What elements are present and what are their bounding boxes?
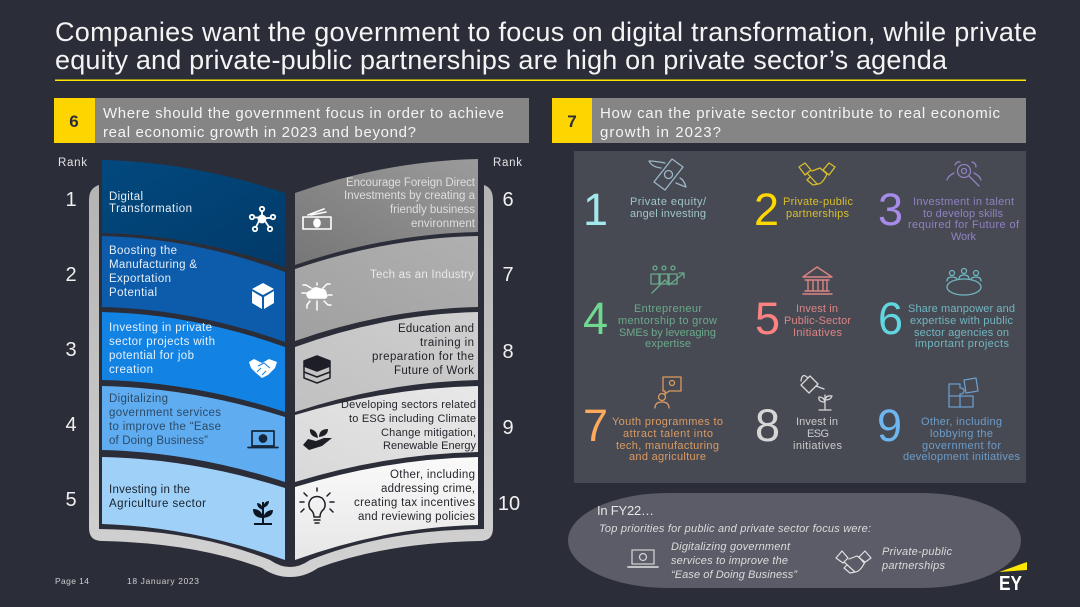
right page: band 8 education and training: training in: [420, 337, 474, 349]
item 8 ESG: initiatives: [793, 440, 842, 452]
item 1 private equity: [583, 159, 707, 235]
left page: band 5 agriculture: Agriculture sector: [109, 498, 206, 510]
book cover: [89, 170, 493, 577]
priority 1 text: “Ease of Doing Business”: [671, 569, 798, 581]
item 4 entrepreneur mentorship: expertise: [645, 338, 691, 350]
rank labels left: 4: [65, 414, 77, 436]
left page: band 2 manufacturing and exportation: [102, 236, 285, 342]
icon: money: [303, 209, 331, 229]
header: question 7: 7: [567, 112, 577, 131]
header: question 6: [54, 98, 529, 143]
rank labels left: 2: [65, 264, 77, 286]
item 1 private equity: Private equity/: [630, 196, 707, 208]
right page: band 8 education and training: Education and: [398, 323, 474, 335]
item 1 private equity: 1: [583, 184, 608, 235]
left page: band 3 private sector projects: Investing in private: [109, 322, 212, 334]
callout: FY22 priorities: In FY22…: [597, 503, 654, 518]
item 3 talent: Investment in talent: [913, 196, 1014, 208]
priority 1 text: services to improve the: [671, 555, 788, 567]
left page: band 4 digitalizing government services: Digitalizing: [109, 393, 168, 405]
item 6 share manpower: Share manpower and: [908, 303, 1015, 315]
icon: cloud circuit: [302, 283, 332, 310]
item 5 public sector: Invest in: [796, 303, 838, 315]
right page: band 9 ESG sectors: to ESG including Climate: [349, 413, 476, 425]
left page: band 5 agriculture: Investing in the: [109, 484, 190, 496]
item 5 public sector: Public-Sector: [784, 315, 851, 327]
priority 2 text: [881, 546, 952, 572]
item 6 share manpower: important projects: [915, 338, 1010, 350]
right page: band 9 ESG sectors: [295, 386, 478, 482]
left page: band 4 digitalizing government services: to improve the “Ease: [109, 421, 221, 433]
icon: handshake: [249, 359, 277, 378]
item 1 private equity: angel investing: [630, 208, 706, 220]
item 9 other: government for: [922, 440, 1001, 452]
item 5 public sector: 5: [755, 293, 780, 344]
priority 2 text: partnerships: [881, 560, 946, 572]
item 2 private-public partnerships: [754, 163, 854, 235]
right page: band 7 tech as an industry: Tech as an Industry: [370, 269, 474, 281]
right page: band 10 other: Other, including: [390, 469, 475, 481]
item 3 talent: 3: [878, 184, 903, 235]
item 9 other: lobbying the: [930, 428, 993, 440]
item 7 youth programmes: Youth programmes to: [612, 416, 723, 428]
icon: magnifier on people: [947, 162, 981, 186]
left page: band 1 digital transformation: [102, 160, 285, 267]
header: question 7: [552, 98, 1026, 143]
item 9 other: development initiatives: [903, 451, 1020, 463]
EY logo: EY: [999, 573, 1023, 595]
rank labels left: [58, 157, 87, 511]
item 6 share manpower: 6: [878, 293, 903, 344]
item 7 youth programmes: and agriculture: [629, 451, 706, 463]
rank labels right: [493, 157, 522, 515]
left page: band 3 private sector projects: sector projects with: [109, 336, 215, 348]
rank labels right: 9: [502, 417, 514, 439]
right page: band 6 foreign direct investment: [295, 159, 478, 265]
item 7 youth programmes: attract talent into: [623, 428, 713, 440]
right page: band 6 foreign direct investment: Encourage Foreign Direct: [346, 177, 476, 189]
right page: band 9 ESG sectors: Renewable Energy: [383, 440, 476, 452]
item 3 talent: to develop skills: [923, 208, 1004, 220]
header: question 7: growth in 2023?: [600, 124, 721, 141]
title: [55, 17, 1037, 75]
title: Companies want the government to focus on digital transformation, while private: [55, 17, 1037, 47]
item 7 youth programmes: 7: [583, 400, 608, 451]
icon: winged money: [649, 159, 686, 190]
panel: private sector contributions: [574, 151, 1026, 483]
item 2 private-public partnerships: partnerships: [786, 208, 850, 220]
rank labels right: 8: [502, 341, 514, 363]
right page: band 6 foreign direct investment: friendly business: [390, 204, 475, 216]
rank labels left: Rank: [58, 157, 87, 169]
rank labels left: 3: [65, 339, 77, 361]
footer: [55, 576, 199, 586]
rank labels left: 5: [65, 489, 77, 511]
item 4 entrepreneur mentorship: Entrepreneur: [634, 303, 702, 315]
right page: band 10 other: and reviewing policies: [358, 511, 475, 523]
rank labels right: Rank: [493, 157, 522, 169]
left page: band 4 digitalizing government services: of Doing Business”: [109, 435, 208, 447]
header: question 6: Where should the government focus in order to achieve: [103, 105, 504, 122]
left page: band 1 digital transformation: Digital: [109, 191, 143, 203]
right page: band 6 foreign direct investment: Investments by creating a: [344, 190, 476, 202]
left page: band 4 digitalizing government services: government services: [109, 407, 221, 419]
item 4 entrepreneur mentorship: mentorship to grow: [618, 315, 717, 327]
icon: person with idea: [655, 377, 681, 408]
item 2 private-public partnerships: Private-public: [783, 196, 854, 208]
callout: FY22 priorities: Top priorities for public and private sector focus were:: [599, 523, 871, 535]
priority 2 text: Private-public: [882, 546, 952, 558]
header: question 7: How can the private sector contribute to real economic: [600, 105, 1000, 122]
icon: handshake: [836, 551, 871, 573]
left page: band 4 digitalizing government services: [102, 386, 285, 482]
right page: band 7 tech as an industry: [295, 236, 478, 341]
title: equity and private-public partnerships are high on private sector’s agenda: [55, 45, 948, 75]
item 3 talent: [878, 162, 1020, 243]
right page: band 10 other: addressing crime,: [381, 483, 475, 495]
icon: hand with plant: [303, 429, 332, 450]
item 2 private-public partnerships: 2: [754, 184, 779, 235]
rank labels right: 6: [502, 189, 514, 211]
icon: plant: [253, 501, 273, 525]
left page: band 1 digital transformation: Transformation: [109, 203, 192, 215]
item 8 ESG: Invest in: [796, 416, 838, 428]
right page: band 8 education and training: Future of Work: [394, 365, 474, 377]
icon: network: [250, 207, 275, 231]
right page: band 8 education and training: preparation for the: [372, 351, 474, 363]
priority 1 text: [671, 541, 798, 581]
callout: FY22 priorities: [568, 493, 1021, 588]
item 8 ESG: 8: [755, 400, 780, 451]
icon: watering can: [801, 376, 832, 410]
icon: laptop: [628, 550, 658, 567]
right page: band 10 other: [295, 457, 478, 560]
item 9 other: Other, including: [921, 416, 1002, 428]
right page: band 9 ESG sectors: Developing sectors related: [341, 399, 476, 411]
rank labels right: 10: [498, 493, 520, 515]
left page: band 2 manufacturing and exportation: Manufacturing &: [109, 259, 197, 271]
item 6 share manpower: sector agencies on: [914, 327, 1009, 339]
icon: people growth: [651, 266, 684, 293]
item 4 entrepreneur mentorship: [583, 266, 717, 350]
item 9 other: 9: [877, 400, 902, 451]
header: question 6: 6: [69, 112, 79, 131]
icon: bank: [803, 267, 832, 294]
right page: band 6 foreign direct investment: environment: [411, 218, 476, 230]
icon: puzzle: [949, 378, 978, 407]
right page: band 10 other: creating tax incentives: [354, 497, 475, 509]
item 6 share manpower: expertise with public: [910, 315, 1014, 327]
right page: band 8 education and training: [295, 312, 478, 412]
item 4 entrepreneur mentorship: 4: [583, 293, 608, 344]
left page: band 5 agriculture: [102, 457, 285, 560]
item 7 youth programmes: [583, 377, 723, 463]
left page: band 2 manufacturing and exportation: Exportation: [109, 273, 171, 285]
item 3 talent: required for Future of: [908, 219, 1020, 231]
icon: meeting table: [947, 268, 981, 295]
icon: box: [252, 283, 274, 309]
item 3 talent: Work: [951, 231, 976, 243]
priority 1 text: Digitalizing government: [671, 541, 791, 553]
left page: band 3 private sector projects: potential for job: [109, 350, 194, 362]
item 7 youth programmes: tech, manufacturing: [616, 440, 719, 452]
left page: band 2 manufacturing and exportation: Boosting the: [109, 245, 177, 257]
item 8 ESG: ESG: [807, 428, 829, 440]
rank labels left: 1: [65, 189, 77, 211]
EY logo: [999, 562, 1027, 595]
footer: 18 January 2023: [127, 576, 199, 586]
item 5 public sector: Initiatives: [793, 327, 842, 339]
icon: laptop: [248, 431, 278, 448]
item 4 entrepreneur mentorship: SMEs by leveraging: [619, 327, 716, 339]
footer: Page 14: [55, 576, 89, 586]
item 6 share manpower: [878, 268, 1015, 350]
icon: handshake: [799, 163, 835, 185]
item 5 public sector: [755, 267, 851, 344]
item 8 ESG: [755, 376, 842, 452]
rank labels right: 7: [502, 264, 514, 286]
left page: band 2 manufacturing and exportation: Potential: [109, 287, 157, 299]
icon: books: [304, 356, 330, 383]
header: question 6: real economic growth in 2023 and beyond?: [103, 124, 416, 141]
icon: light bulb: [300, 488, 334, 523]
right page: band 9 ESG sectors: Change mitigation,: [381, 427, 476, 439]
item 9 other: [877, 378, 1020, 463]
left page: band 3 private sector projects: [102, 312, 285, 412]
left page: band 3 private sector projects: creation: [109, 364, 153, 376]
